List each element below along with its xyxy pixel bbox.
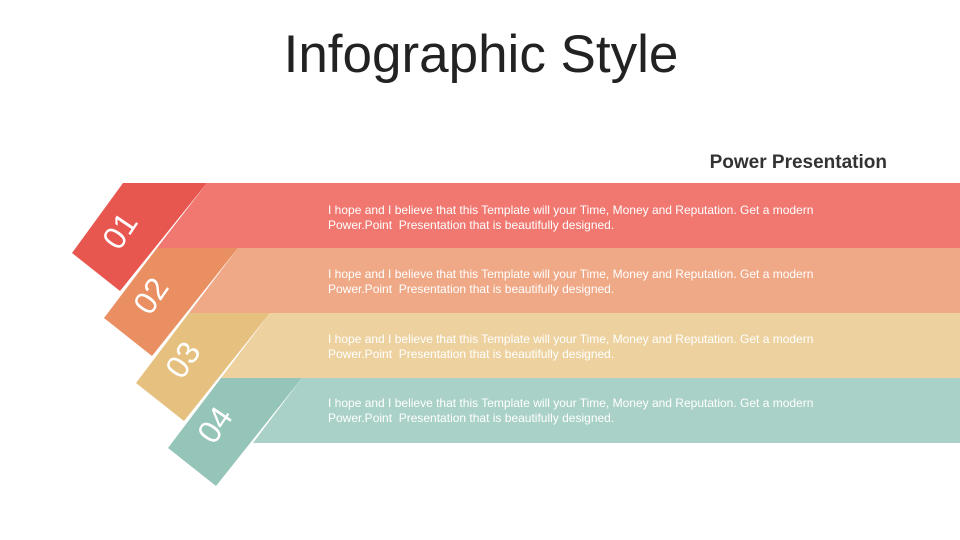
- tab 02: [104, 248, 238, 356]
- band 03: [221, 313, 960, 378]
- subtitle: Power Presentation: [710, 152, 887, 173]
- tab 04: 04: [190, 400, 240, 450]
- tab 03: [136, 313, 270, 421]
- text 02: I hope and I believe that this Template will your Time, Money and Reputation. Get a modern Power.Point Presentation that is beautifully designed.: [328, 267, 813, 296]
- band 01: [157, 183, 960, 248]
- tab 01: 01: [95, 206, 145, 256]
- tab 04: [168, 378, 302, 486]
- text 03: I hope and I believe that this Template will your Time, Money and Reputation. Get a modern Power.Point Presentation that is beautifully designed.: [328, 332, 813, 360]
- band 04: [253, 378, 960, 443]
- text 04: I hope and I believe that this Template will your Time, Money and Reputation. Get a modern Power.Point Presentation that is beautifully designed.: [328, 396, 813, 424]
- band 02: [189, 248, 960, 313]
- tab 03: 03: [158, 335, 208, 385]
- tab 01: [72, 183, 207, 291]
- text 01: I hope and I believe that this Template will your Time, Money and Reputation. Get a modern Power.Point Presentation that is beautifully designed.: [328, 203, 813, 232]
- tab 02: 02: [126, 271, 176, 321]
- title: Infographic Style: [284, 25, 678, 84]
